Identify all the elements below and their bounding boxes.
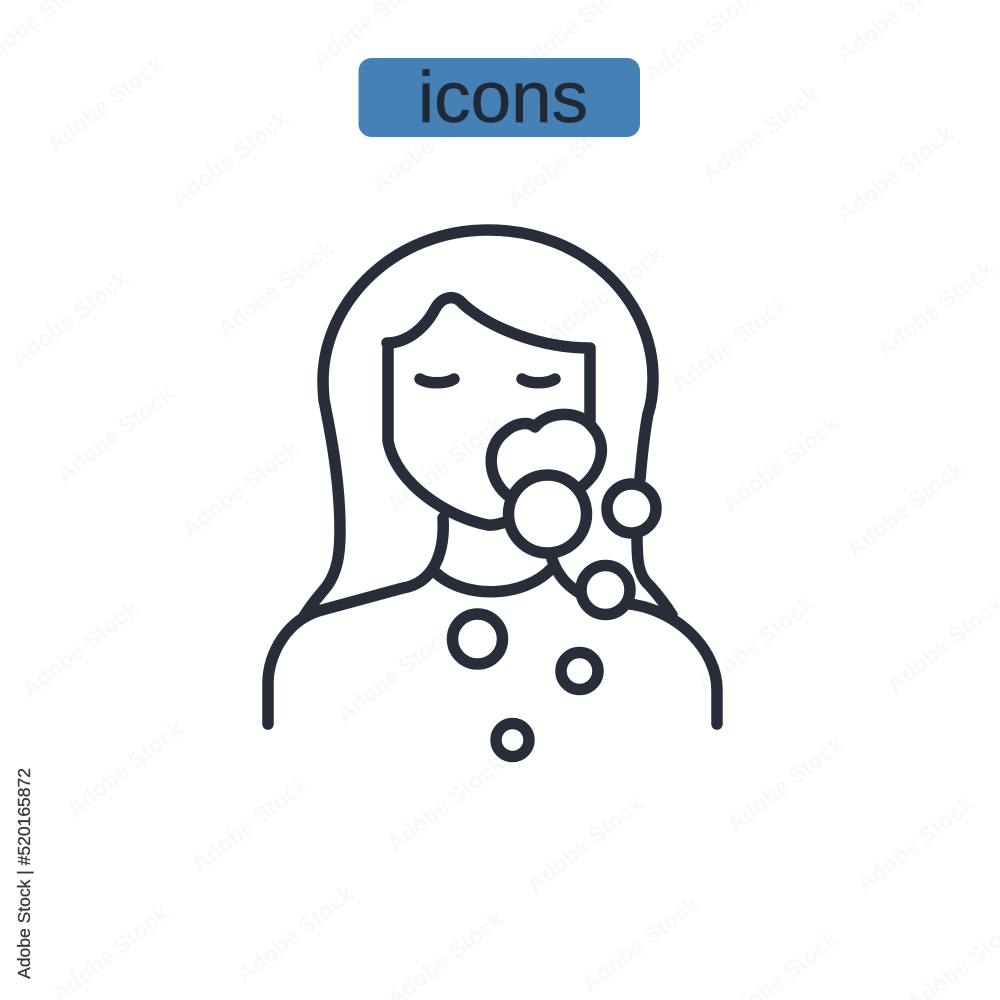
- stock watermark pattern: Adobe Stock: [382, 410, 509, 517]
- stock watermark pattern: Adobe Stock: [167, 105, 294, 212]
- stock watermark pattern: Adobe Stock: [692, 590, 819, 697]
- stock watermark pattern: Adobe Stock: [177, 435, 304, 542]
- badge: icons label: icons: [418, 58, 588, 138]
- hair outline: [303, 230, 653, 618]
- stock watermark pattern: Adobe Stock: [522, 790, 649, 897]
- stock id caption: Adobe Stock | #520165872: [14, 768, 34, 979]
- stock watermark pattern: Adobe Stock: [382, 750, 509, 857]
- stock watermark pattern: Adobe Stock: [832, 120, 959, 227]
- stock watermark pattern: Adobe Stock: [17, 595, 144, 702]
- stock watermark pattern: Adobe Stock: [212, 235, 339, 342]
- neck to right bubble: [552, 559, 578, 592]
- shoulder bubble: [581, 566, 630, 614]
- stock watermark pattern: Adobe Stock: [717, 410, 844, 517]
- stock watermark pattern: Adobe Stock: [332, 620, 459, 727]
- right bubble: [607, 484, 656, 533]
- right shoulder: [630, 604, 717, 724]
- badge: icons label: [358, 58, 640, 138]
- stock watermark pattern: Adobe Stock: [52, 380, 179, 487]
- foam cloud: [491, 414, 601, 497]
- main foam bubble: [508, 475, 586, 553]
- stock watermark pattern: Adobe Stock: [577, 890, 704, 997]
- left eye: [420, 379, 454, 383]
- icon: woman washing with foam bubbles: [268, 230, 717, 756]
- hair lower right strand: [637, 536, 672, 615]
- stock watermark pattern: Adobe Stock: [542, 240, 669, 347]
- stock watermark pattern: Adobe Stock: [232, 880, 359, 987]
- stock watermark pattern: Adobe Stock: [7, 265, 134, 372]
- face outline and fringe: [387, 298, 590, 525]
- stock watermark pattern: Adobe Stock: [367, 90, 494, 197]
- stock watermark pattern: Adobe Stock: [872, 255, 999, 362]
- neck and left shoulder: [268, 518, 443, 724]
- chest bubble medium: [561, 652, 598, 690]
- chest bubble large: [452, 614, 502, 664]
- stock watermark pattern: Adobe Stock: [852, 790, 979, 897]
- stock watermark pattern: Adobe Stock: [42, 50, 169, 157]
- stock watermark pattern: Adobe Stock: [697, 80, 824, 187]
- stock watermark pattern: Adobe Stock: [722, 730, 849, 837]
- chest bubble small: [496, 724, 529, 756]
- collar curve: [435, 568, 552, 592]
- stock watermark pattern: Adobe Stock: [62, 715, 189, 822]
- right eye: [522, 379, 555, 383]
- stock watermark pattern: Adobe Stock: [187, 770, 314, 877]
- stock watermark pattern: Adobe Stock: [842, 455, 969, 562]
- stock watermark pattern: Adobe Stock: [667, 290, 794, 397]
- stock watermark pattern: Adobe Stock: [502, 105, 629, 212]
